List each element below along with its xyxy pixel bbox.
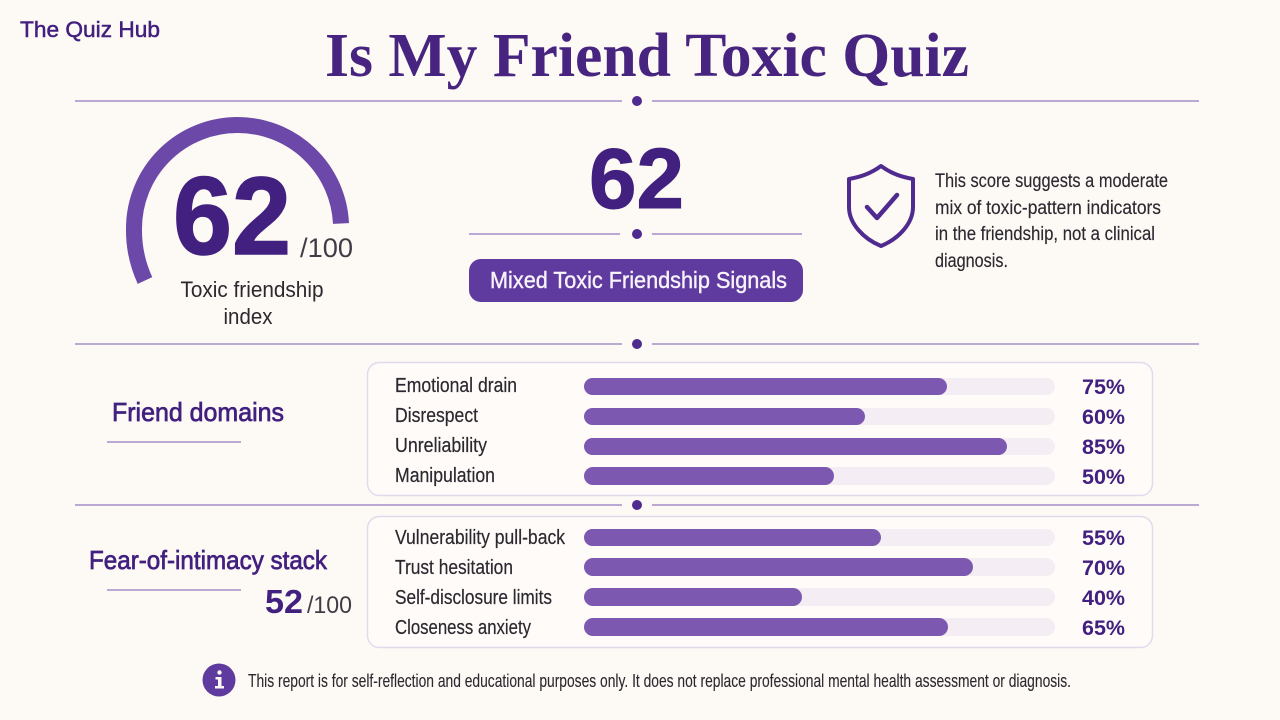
- row: self-disclosure limits 40%: 40%: [1082, 587, 1125, 610]
- row: emotional drain 75%: [395, 375, 1125, 399]
- panel: fear-of-intimacy bars: [368, 516, 1152, 648]
- row: emotional drain 75%: Emotional drain: [395, 375, 517, 397]
- heading: friend domains: Friend domains: [112, 397, 284, 427]
- row: trust hesitation 70%: Trust hesitation: [395, 557, 513, 579]
- gauge scale: /100: [300, 233, 353, 263]
- row: trust hesitation 70%: 70%: [1082, 557, 1125, 580]
- row: self-disclosure limits 40%: Self-disclosure limits: [395, 587, 552, 609]
- score explanation: [935, 171, 1168, 272]
- heading: fear-of-intimacy stack: Fear-of-intimacy stack: [89, 545, 328, 575]
- row: vulnerability pull-back 55%: Vulnerability pull-back: [395, 527, 566, 549]
- title: Is My Friend Toxic Quiz: [325, 22, 969, 90]
- panel: central score: [469, 132, 803, 302]
- row: closeness anxiety 65%: [395, 617, 1125, 640]
- gauge score: 62: [173, 155, 291, 278]
- row: closeness anxiety 65%: Closeness anxiety: [395, 617, 531, 639]
- row: disrespect 60%: [395, 405, 1125, 429]
- row: trust hesitation 70%: [395, 557, 1125, 580]
- row: manipulation 50%: [395, 465, 1125, 489]
- icon: shield with check: [849, 166, 913, 246]
- central score number: 62: [589, 132, 684, 227]
- row: unreliability 85%: Unreliability: [395, 435, 487, 457]
- stack score: 52: [265, 583, 303, 620]
- brand label: The Quiz Hub: [20, 17, 160, 42]
- heading: fear-of-intimacy stack: [89, 545, 352, 620]
- score explanation: diagnosis.: [935, 251, 1008, 272]
- gauge caption: [180, 277, 324, 329]
- row: disrespect 60%: 60%: [1082, 406, 1125, 429]
- row: unreliability 85%: 85%: [1082, 436, 1125, 459]
- gauge arc: [134, 125, 341, 280]
- row: vulnerability pull-back 55%: [395, 527, 1125, 550]
- score explanation: in the friendship, not a clinical: [935, 224, 1155, 245]
- row: vulnerability pull-back 55%: 55%: [1082, 527, 1125, 550]
- row: manipulation 50%: 50%: [1082, 466, 1125, 489]
- row: disrespect 60%: Disrespect: [395, 405, 478, 427]
- icon: info: [202, 664, 236, 696]
- row: emotional drain 75%: 75%: [1082, 376, 1125, 399]
- panel: friend domain bars: [368, 362, 1152, 496]
- gauge caption: index: [224, 304, 272, 329]
- stack scale: /100: [307, 592, 352, 619]
- score explanation: mix of toxic-pattern indicators: [935, 198, 1161, 219]
- row: manipulation 50%: Manipulation: [395, 465, 495, 487]
- row: unreliability 85%: [395, 435, 1125, 459]
- panel: gauge: [134, 125, 353, 329]
- row: self-disclosure limits 40%: [395, 587, 1125, 610]
- score band text: Mixed Toxic Friendship Signals: [490, 267, 787, 293]
- row: closeness anxiety 65%: 65%: [1082, 617, 1125, 640]
- gauge caption: Toxic friendship: [180, 277, 324, 302]
- score band pill: [469, 259, 803, 302]
- score explanation: This score suggests a moderate: [935, 171, 1168, 192]
